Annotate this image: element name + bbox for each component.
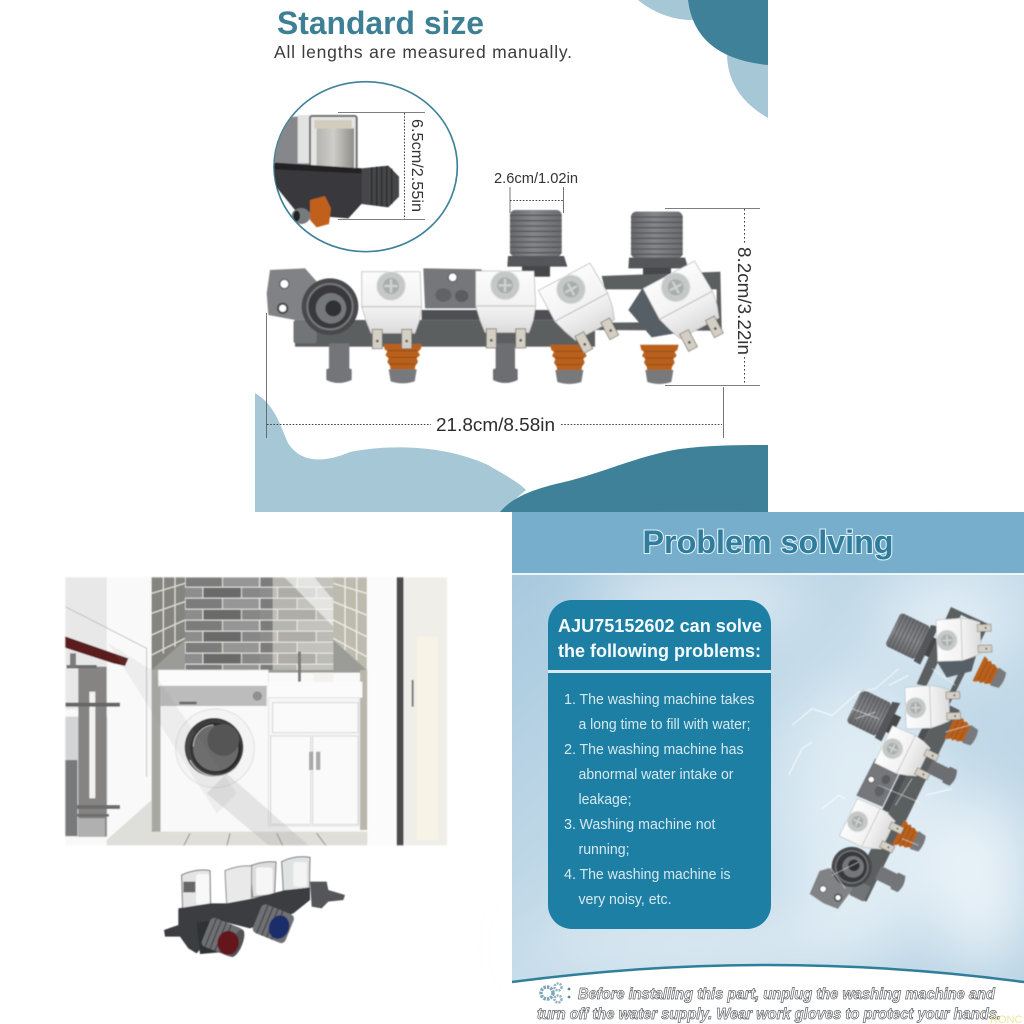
card list: running; [578, 842, 630, 858]
card heading: AJU75152602 can solve [558, 616, 762, 636]
card list: The washing machine takes [580, 692, 754, 708]
warning text [537, 986, 1001, 1023]
coils [182, 857, 310, 911]
card list: 4. [564, 867, 576, 883]
railing [64, 606, 147, 837]
dimension: 6.5cm height [338, 112, 425, 220]
title: Problem solving [642, 524, 894, 560]
icon: gears [541, 984, 570, 1002]
title: Standard size [277, 5, 484, 41]
card list: Washing machine not [580, 817, 716, 833]
footer band [512, 965, 1024, 1024]
right bracket and cap [310, 882, 345, 908]
washing machine [158, 669, 270, 788]
dimension: 2.6cm width [494, 171, 578, 213]
brick wall [152, 576, 367, 673]
card heading: the following problems: [558, 641, 761, 661]
dimension: 8.2cm height [665, 208, 760, 386]
card list: 1. [564, 692, 576, 708]
card list: The washing machine has [580, 742, 744, 758]
card list: leakage; [578, 792, 632, 808]
right door frame [367, 576, 448, 847]
background light patches [540, 574, 1024, 970]
panel: laundry room photo [64, 576, 448, 847]
warning text: turn off the water supply. Wear work gloves to protect your hands. [537, 1006, 1001, 1023]
sink cabinet [268, 652, 362, 826]
dimension: 2.6cm width: 2.6cm/1.02in [494, 171, 578, 187]
dimension: 6.5cm height: 6.5cm/2.55in [408, 119, 425, 212]
card list: 3. [564, 817, 576, 833]
card list: very noisy, etc. [578, 892, 672, 908]
dimension: 21.8cm width [266, 313, 724, 438]
panel: standard size [255, 0, 768, 512]
blue inlet [251, 903, 295, 944]
card: problems list [548, 600, 771, 929]
image: rotated valve with water splash [770, 580, 1024, 931]
dimension: 21.8cm width: 21.8cm/8.58in [436, 415, 555, 436]
image: small valve back view [164, 857, 345, 961]
red inlet [200, 917, 248, 961]
inset: side view circle [273, 82, 457, 252]
base [164, 887, 310, 953]
image: valve main [267, 210, 732, 384]
card heading [558, 616, 762, 661]
card list [564, 692, 754, 908]
card list: 2. [564, 742, 576, 758]
warning text: Before installing this part, unplug the washing machine and [578, 986, 995, 1003]
panel: problem solving [512, 512, 1024, 1024]
photo edge fade [64, 576, 448, 847]
background blobs [255, 0, 768, 512]
subtitle: All lengths are measured manually. [274, 42, 572, 62]
card list: The washing machine is [580, 867, 730, 883]
splash [789, 669, 952, 809]
dimension: 8.2cm height: 8.2cm/3.22in [734, 247, 755, 355]
floor [129, 831, 368, 846]
shadow diagonals [207, 773, 310, 847]
header band [512, 512, 1024, 573]
card list: abnormal water intake or [578, 767, 734, 783]
card list: a long time to fill with water; [578, 717, 750, 733]
